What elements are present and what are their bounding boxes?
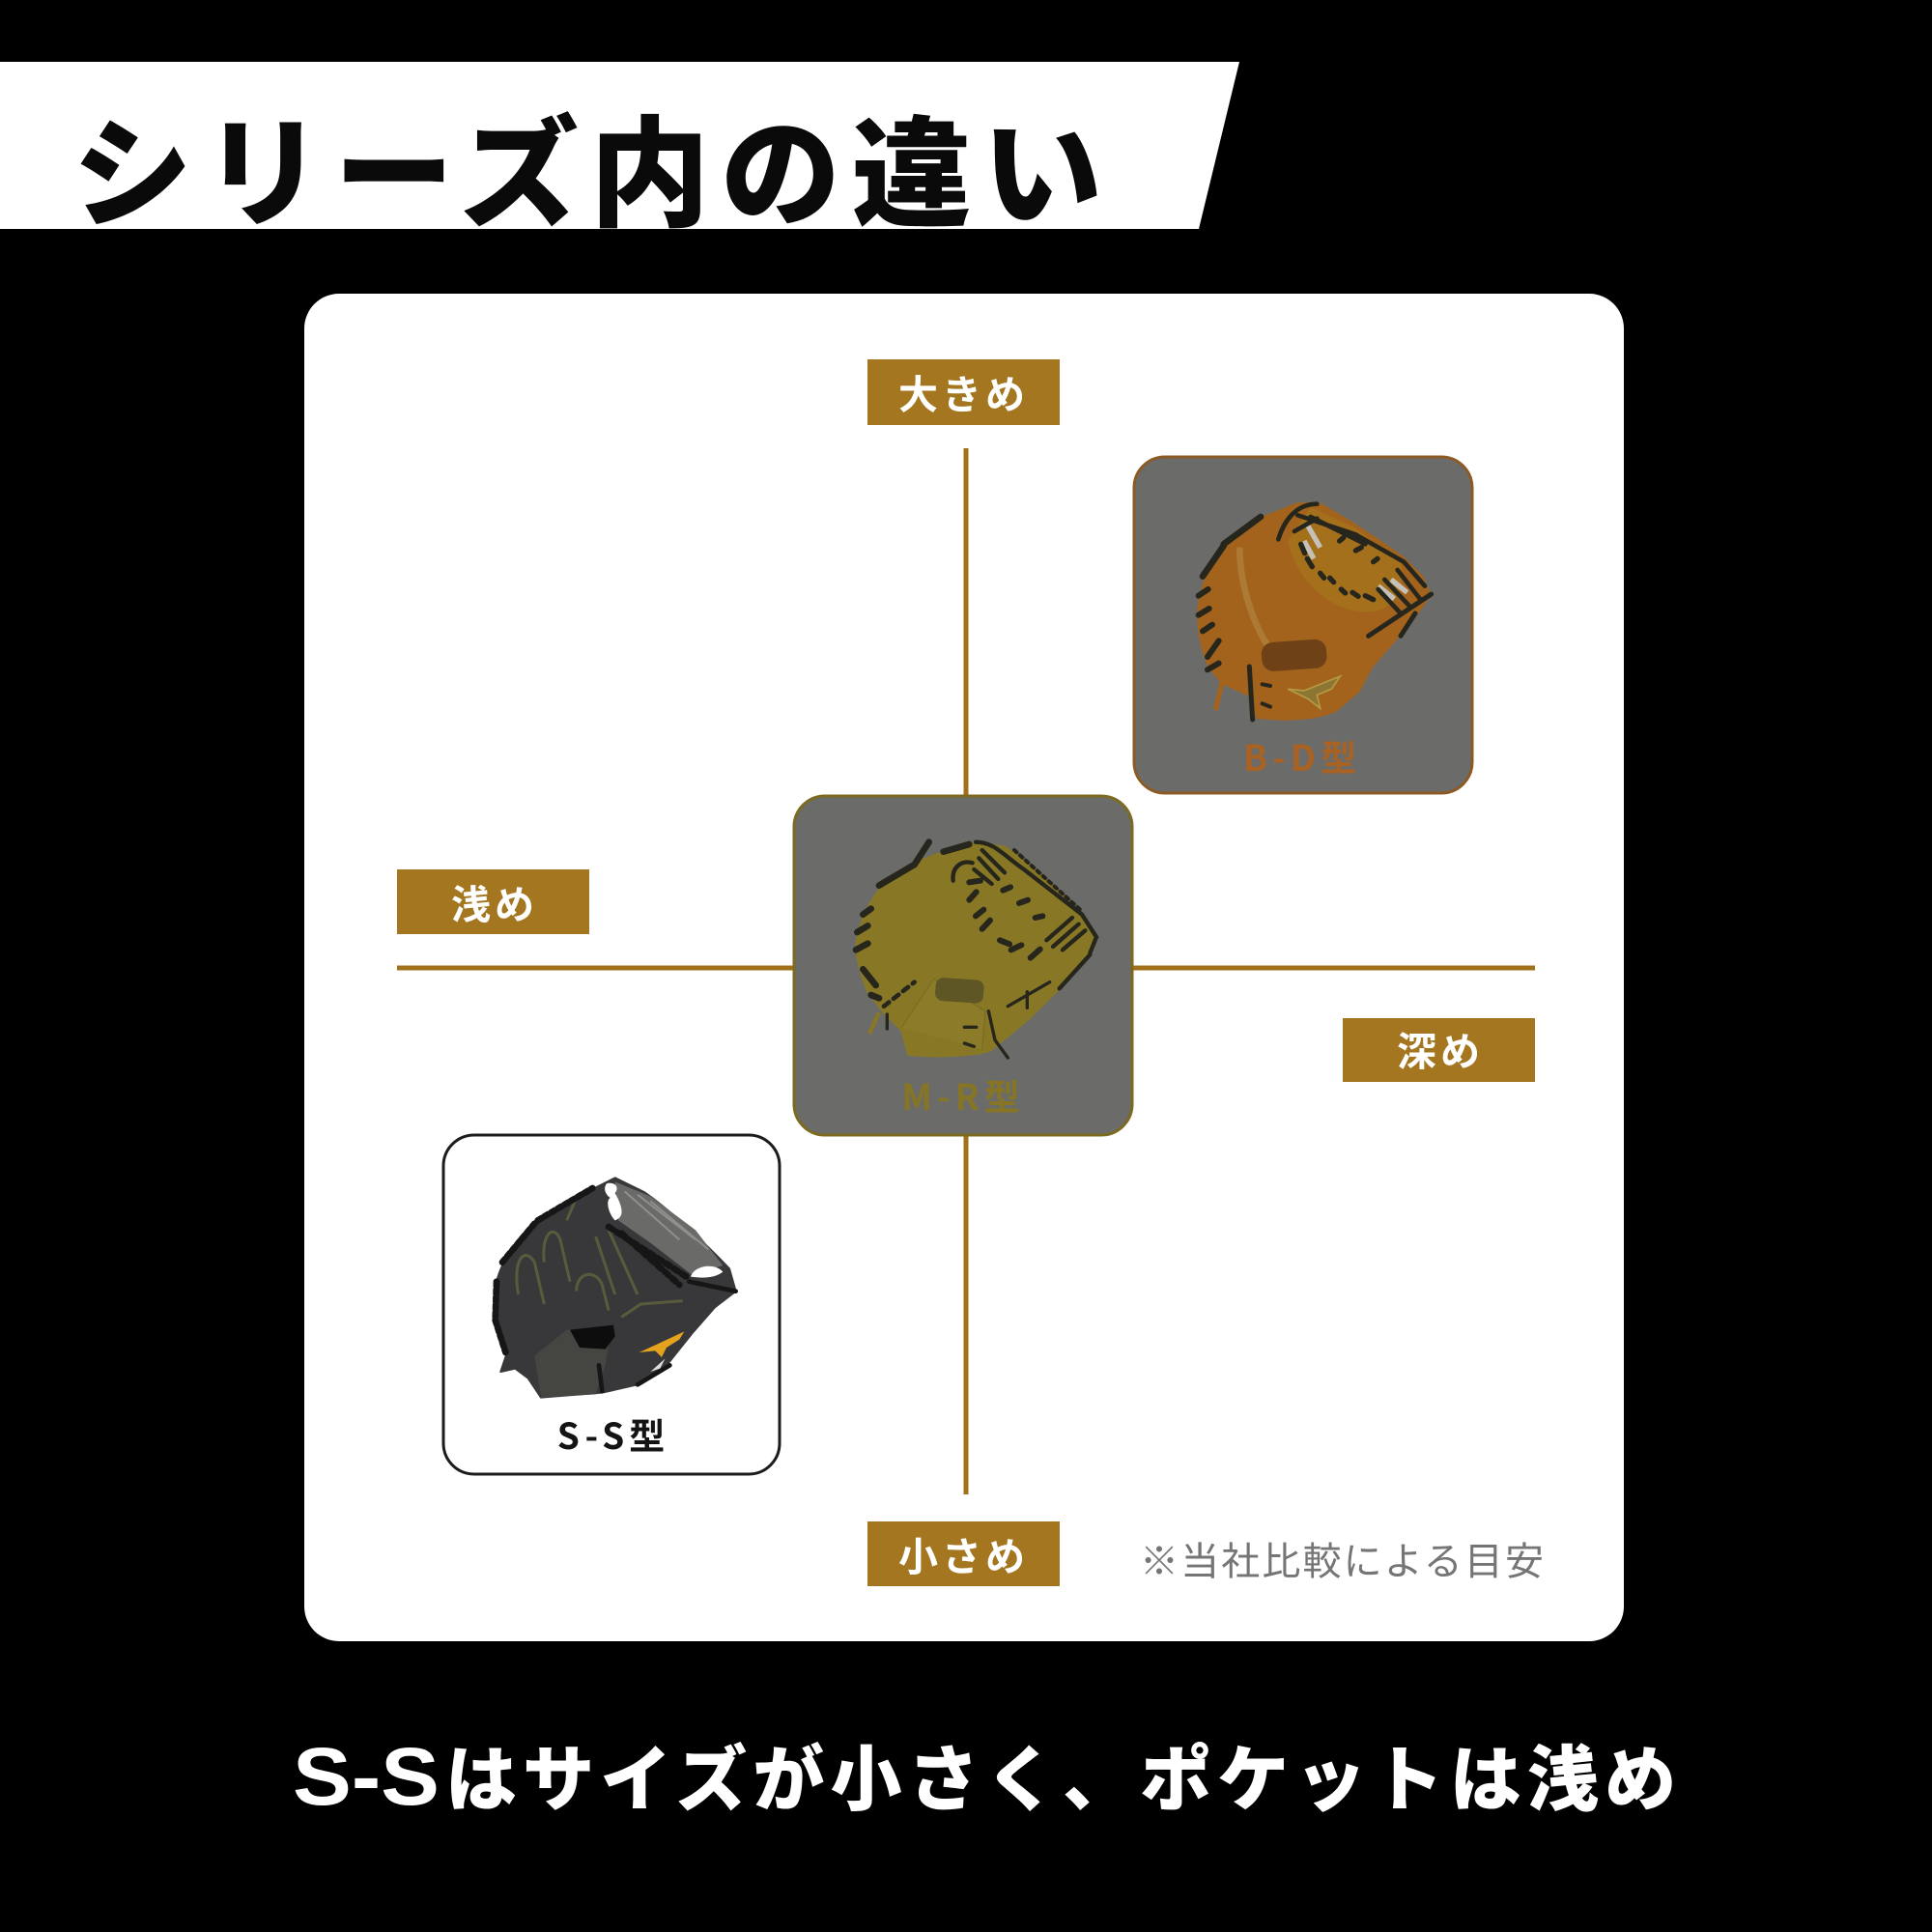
card: S-S type [443,1135,780,1474]
caption: はサイズが小さく、ポケットは浅め [445,1722,1676,1826]
icon: B-D catcher mitt [1199,503,1432,720]
panel: comparison chart [304,294,1624,1641]
label: deep [1343,1018,1535,1082]
title: シリーズ内の違い [72,77,1102,251]
horizontal axis: pocket depth [397,966,1535,970]
label: small [867,1521,1060,1586]
vertical axis: size [964,448,968,1494]
label: small: 小さめ [898,1524,1029,1582]
caption: S-S [293,1731,440,1822]
S-S label: S-S型 [557,1407,669,1460]
label: large [867,359,1060,425]
card: B-D type [1134,457,1472,793]
title banner [0,62,1239,251]
icon: M-R catcher mitt [856,842,1096,1058]
icon: S-S catcher mitt [496,1178,736,1398]
label: large: 大きめ [898,362,1029,420]
M-R label: M-R型 [901,1068,1025,1121]
footnote: ※当社比較による目安 [1140,1530,1544,1586]
card: M-R type [794,796,1132,1135]
label: shallow: 浅め [451,872,538,930]
label: deep: 深め [1397,1019,1484,1077]
label: shallow [397,869,589,934]
B-D label: B-D型 [1243,729,1361,781]
